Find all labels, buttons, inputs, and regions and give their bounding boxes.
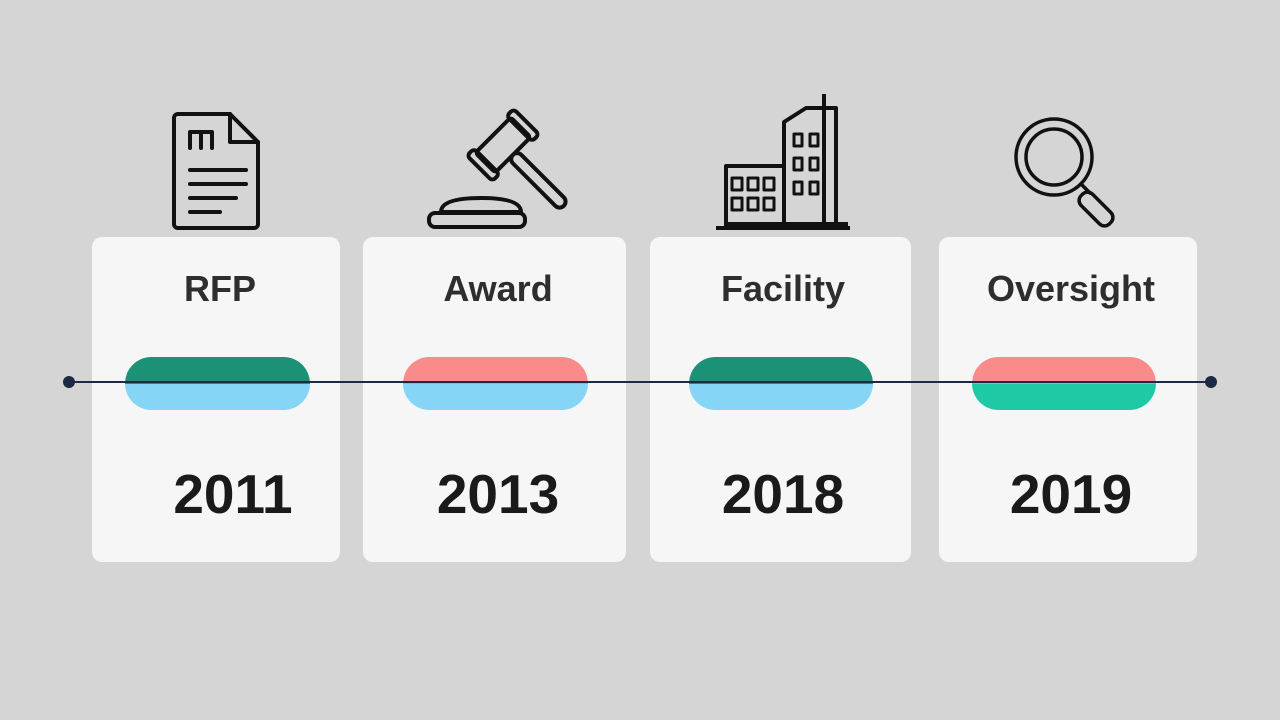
- card: RFP: [92, 237, 340, 562]
- icon: buildings: [716, 94, 850, 230]
- year 2011: 2011: [173, 463, 293, 525]
- icon: magnifier: [1014, 117, 1115, 228]
- year 2018: 2018: [722, 463, 844, 525]
- pill 1: [125, 357, 310, 410]
- title: Oversight: Oversight: [987, 268, 1155, 309]
- year 2019: 2019: [1010, 463, 1132, 525]
- year 2013: 2013: [437, 463, 559, 525]
- pill 4: [972, 357, 1156, 410]
- pill 2: [403, 357, 588, 410]
- card: Award: [363, 237, 626, 562]
- card: Oversight: [939, 237, 1197, 562]
- icon: document: [172, 112, 260, 230]
- title: Facility: Facility: [721, 268, 845, 309]
- pill 3: [689, 357, 873, 410]
- card: Facility: [650, 237, 911, 562]
- icon: gavel: [427, 108, 568, 229]
- title: RFP: RFP: [184, 268, 256, 309]
- title: Award: Award: [443, 268, 553, 309]
